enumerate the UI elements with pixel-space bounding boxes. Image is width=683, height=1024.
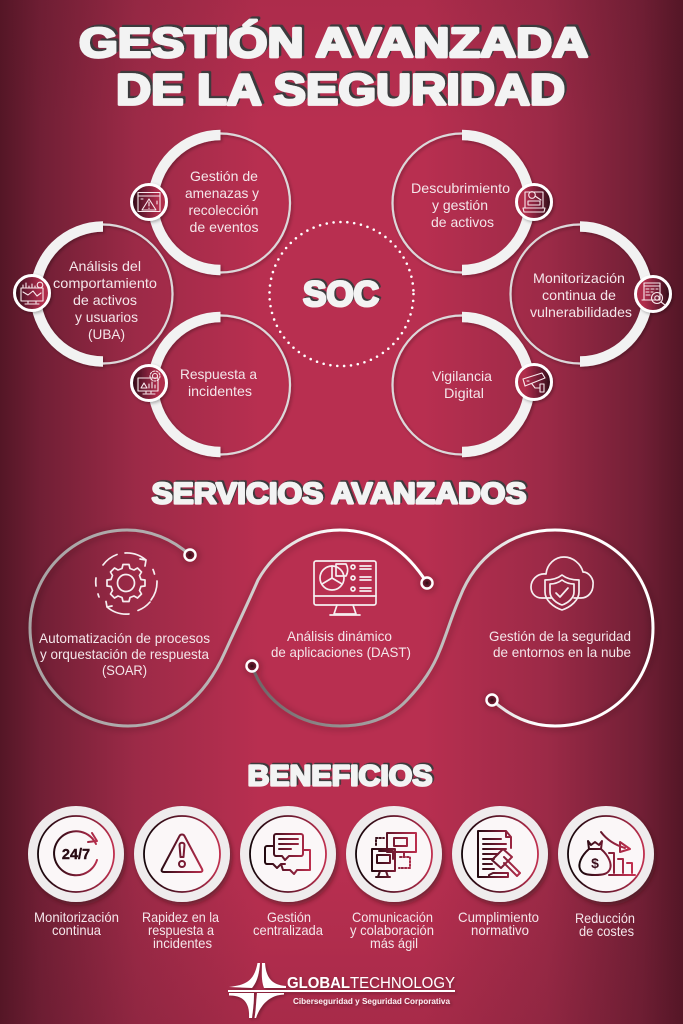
ring xyxy=(510,224,648,364)
text: nube: Gestión de la seguridad xyxy=(489,628,631,644)
logo tagline: Ciberseguridad y Seguridad Corporativa xyxy=(293,996,450,1006)
label: normativo xyxy=(471,922,529,938)
heading: beneficios: BENEFICIOS xyxy=(248,760,432,792)
text: Descubrimiento xyxy=(411,180,510,196)
text: nube: de entornos en la nube xyxy=(493,644,631,660)
SOC center: dotted circle xyxy=(270,222,414,366)
badge icon: monitor and gear xyxy=(132,366,166,400)
label: continua xyxy=(52,922,101,938)
text: Gestión de xyxy=(190,168,258,184)
label: y colaboración xyxy=(350,922,434,938)
text: nube xyxy=(489,628,631,660)
text xyxy=(185,168,259,235)
text: y usuarios xyxy=(75,309,138,325)
text: (UBA) xyxy=(88,326,125,342)
text xyxy=(530,270,632,320)
text xyxy=(53,258,157,342)
text: DAST: de aplicaciones (DAST) xyxy=(271,644,411,660)
icon disc: $ xyxy=(591,855,599,871)
text: Monitorización xyxy=(533,270,625,286)
label: Comunicación xyxy=(352,909,433,925)
benefit: monitorización continua xyxy=(28,806,124,938)
title: DE LA SEGURIDAD xyxy=(116,66,565,114)
benefit: comunicación xyxy=(346,806,442,951)
panel: Monitorización continua de vulnerabilidades xyxy=(510,224,670,364)
benefit: rapidez xyxy=(134,806,230,951)
badge icon: security camera xyxy=(516,364,552,400)
text: Digital xyxy=(444,385,484,401)
icon disc xyxy=(240,806,336,902)
benefit: cumplimiento xyxy=(452,806,548,938)
label: respuesta a xyxy=(148,922,214,938)
icon disc: 24/7 xyxy=(62,847,90,863)
benefit: reducción de costes xyxy=(558,806,654,939)
label: Reducción xyxy=(575,910,635,926)
text: DAST: Análisis dinámico xyxy=(287,628,392,644)
SOC label: SOC xyxy=(303,275,379,314)
label: Monitorización xyxy=(34,909,119,925)
text: Respuesta a xyxy=(180,366,257,382)
label: incidentes xyxy=(153,935,212,951)
label: Gestión xyxy=(267,909,311,925)
icon disc xyxy=(346,806,442,902)
ring xyxy=(153,134,290,272)
text: de eventos xyxy=(190,219,258,235)
text: de activos xyxy=(73,292,137,308)
label: de costes xyxy=(579,923,634,939)
text xyxy=(432,368,492,401)
text: comportamiento xyxy=(53,275,157,291)
logo name: GLOBAL xyxy=(287,975,350,992)
text xyxy=(180,366,257,399)
title xyxy=(79,18,588,114)
label: Cumplimiento xyxy=(458,909,539,925)
logo: Global Technology xyxy=(228,963,455,1018)
label xyxy=(142,909,219,951)
badge icon: analytics monitor xyxy=(14,276,50,310)
panel: Gestión de amenazas xyxy=(132,134,290,272)
heading: servicios avanzados: SERVICIOS AVANZADOS xyxy=(152,478,526,510)
ring xyxy=(35,224,172,364)
text: recolección xyxy=(188,202,258,218)
text: SOAR xyxy=(39,630,210,678)
text: amenazas y xyxy=(185,185,259,201)
text xyxy=(411,180,510,230)
badge icon: warning window xyxy=(132,184,166,220)
label: Rapidez en la xyxy=(142,909,219,925)
ring xyxy=(393,134,530,272)
label: centralizada xyxy=(253,922,323,938)
logo star xyxy=(228,963,286,1018)
badge icon: laptop with magnifier xyxy=(516,184,552,220)
label: más ágil xyxy=(370,935,418,951)
title: GESTIÓN AVANZADA xyxy=(79,18,588,66)
label xyxy=(575,910,635,939)
icon: monitor with pie chart xyxy=(314,561,376,615)
text: vulnerabilidades xyxy=(530,304,632,320)
panel: Vigilancia Digital xyxy=(393,316,552,454)
text: Análisis del xyxy=(69,258,141,274)
text: incidentes xyxy=(188,383,252,399)
text: DAST xyxy=(271,628,411,660)
icon: gear with arrows xyxy=(96,553,157,614)
panel: Descubrimiento y gestión de activos xyxy=(393,134,552,272)
icon disc xyxy=(134,806,230,902)
icon disc xyxy=(452,806,548,902)
text: continua de xyxy=(542,287,616,303)
badge icon: grid and magnifier xyxy=(636,276,670,312)
label xyxy=(350,909,434,951)
icon: cloud with shield xyxy=(531,557,593,610)
panel: servicios curve xyxy=(30,530,653,726)
ring xyxy=(393,316,530,454)
benefit: gestión centralizada xyxy=(240,806,336,938)
text: de activos xyxy=(431,214,494,230)
panel: Respuesta a incidentes xyxy=(132,316,290,454)
label xyxy=(34,909,119,938)
text: SOAR: y orquestación de respuesta xyxy=(40,646,209,662)
label xyxy=(458,909,539,938)
panel: Análisis del comportamiento xyxy=(14,224,172,364)
text: SOAR: Automatización de procesos xyxy=(39,630,210,646)
logo: Global Technology: TECHNOLOGY xyxy=(350,975,455,992)
label xyxy=(253,909,323,938)
text: SOAR: (SOAR) xyxy=(102,662,147,678)
ring xyxy=(153,316,290,454)
text: y gestión xyxy=(432,197,488,213)
text: Vigilancia xyxy=(432,368,492,384)
